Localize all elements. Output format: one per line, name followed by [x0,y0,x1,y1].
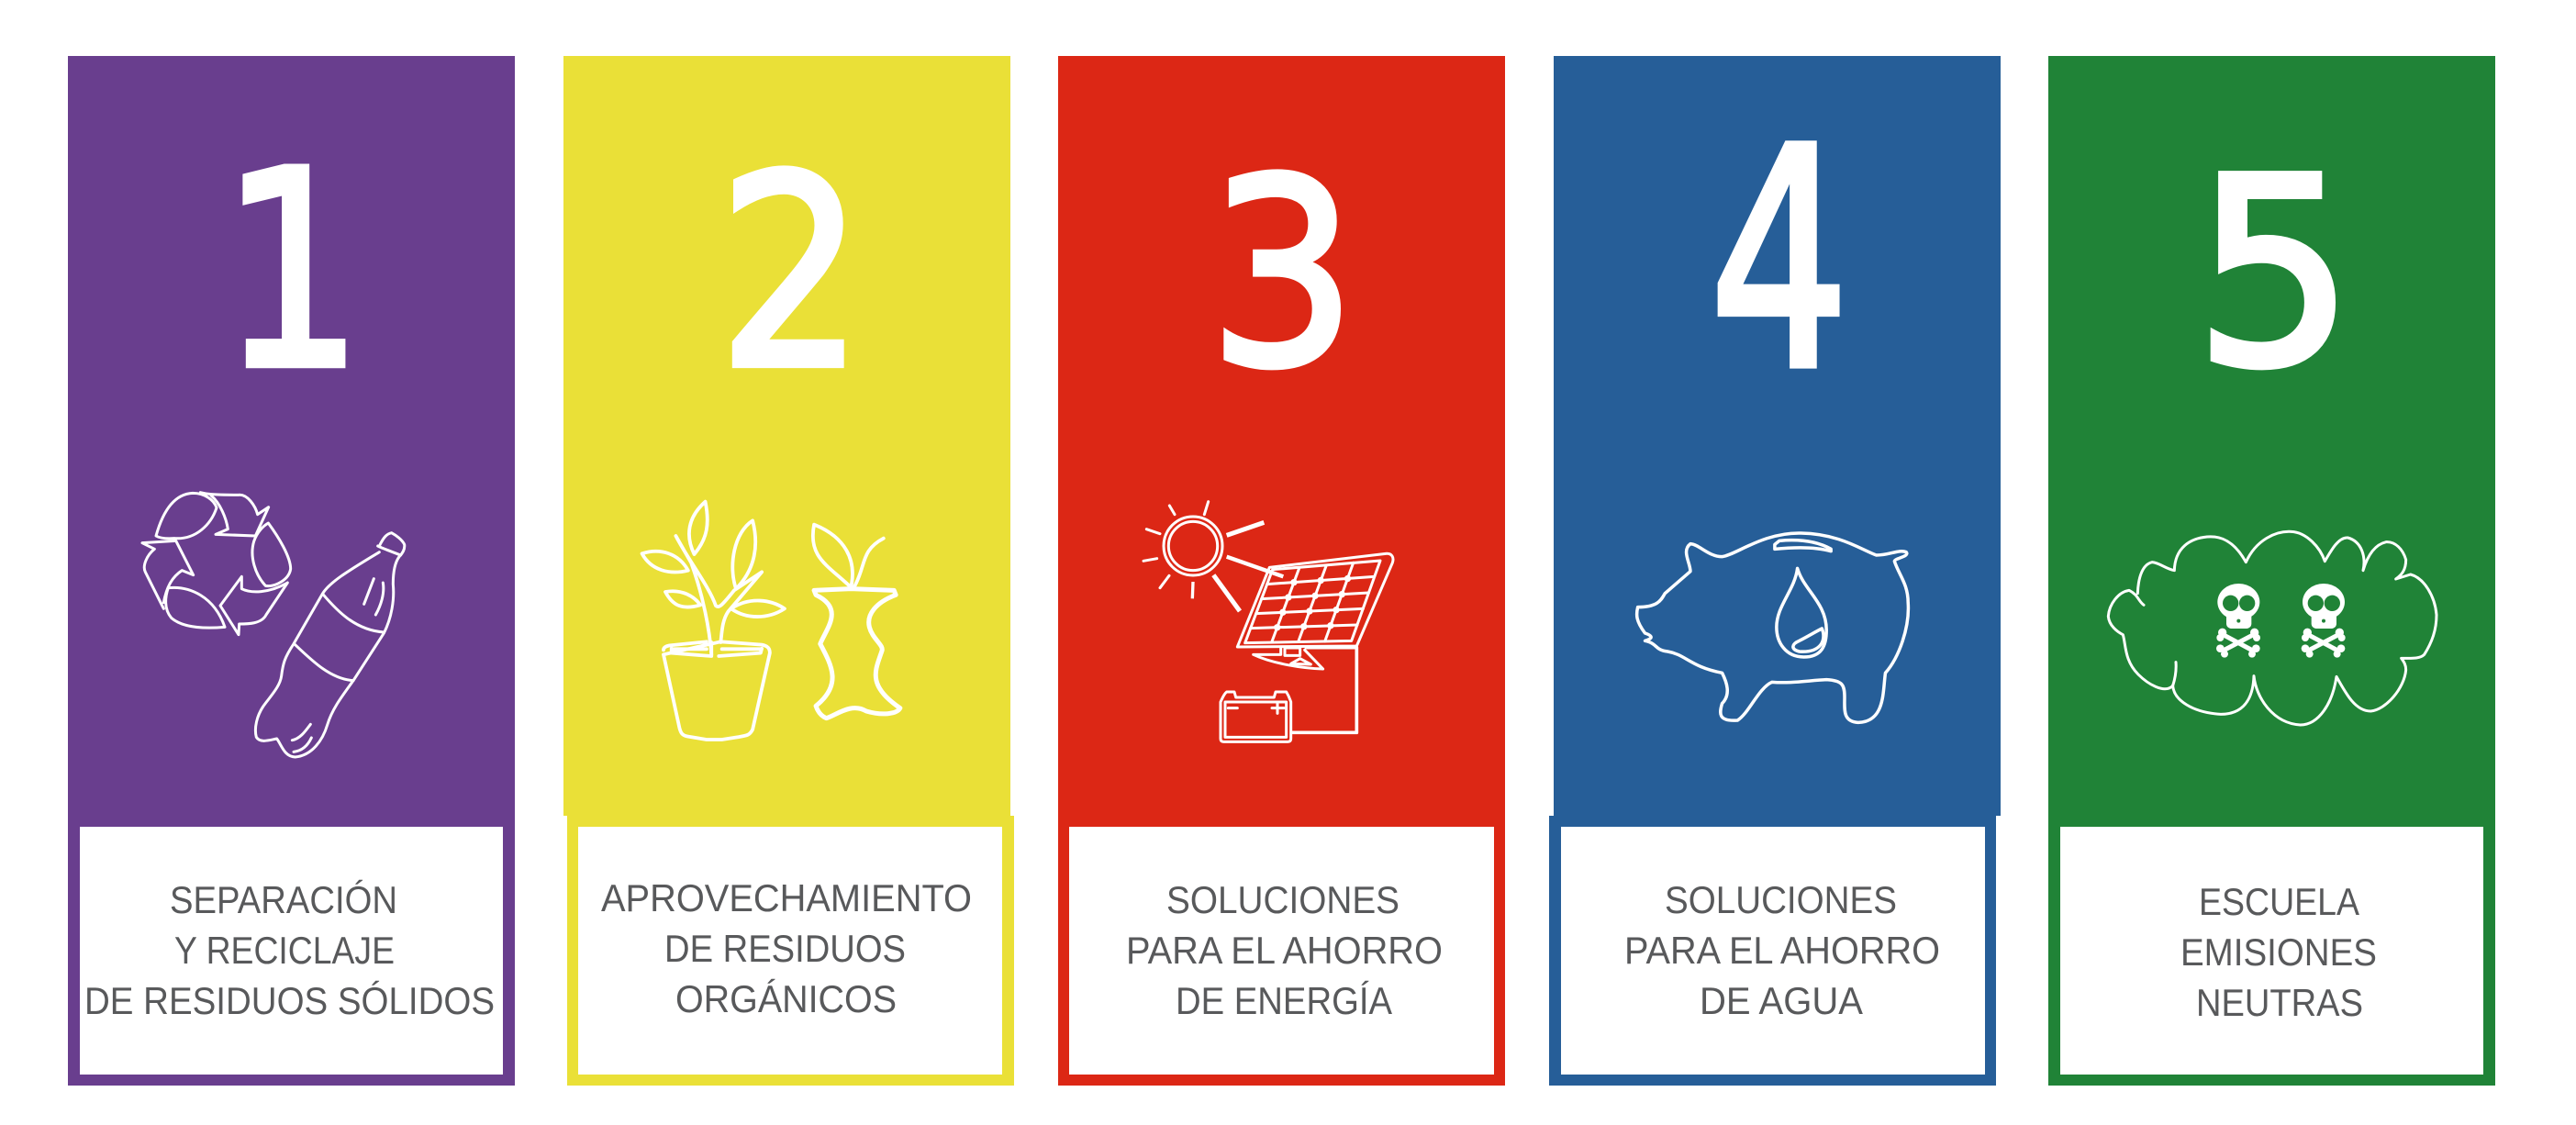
panel 3 label text: SOLUCIONES [1166,878,1400,921]
icon: potted plant and apple core [642,502,900,740]
icon: recycle symbol and plastic bottle [142,493,405,757]
panel 1 label box [80,827,503,1075]
panel 3 background [1058,56,1505,1086]
panel 2 label text: ORGÁNICOS [675,977,897,1020]
panel 3 label text: PARA EL AHORRO [1126,929,1443,972]
panel 3: soluciones para el ahorro de energía [1058,56,1505,1086]
panel 4 label text [1624,878,1940,1022]
panel 2 background [563,56,1014,1086]
panel 4 label text: DE AGUA [1700,979,1863,1022]
panel 5 background [2048,56,2495,1086]
panel 2 number: 2 [719,120,864,428]
panel 5 label text: NEUTRAS [2196,981,2363,1024]
panel 2 label text: APROVECHAMIENTO [601,876,972,919]
skull and crossbones 1 [2216,584,2260,658]
panel 4 label text: PARA EL AHORRO [1624,929,1940,972]
panel 4 label box [1561,827,1985,1075]
icon: toxic cloud with two skulls [2108,531,2437,725]
icon: sun, solar panel and battery [1143,502,1393,741]
panel 1: separación y reciclaje [68,56,515,1086]
panel 3 label text: DE ENERGÍA [1176,979,1392,1022]
panel 1 background [68,56,515,1086]
panel 5 label text [2180,880,2377,1024]
icon: piggy bank with water drop [1637,533,1908,722]
skull and crossbones 2 [2302,584,2346,658]
panel 5 label text: EMISIONES [2180,930,2377,974]
panel 1 label text: DE RESIDUOS SÓLIDOS [84,979,495,1022]
panel 2: aprovechamiento de residuos orgánicos [563,56,1014,1086]
panel 1 number: 1 [221,114,363,429]
panel 2 label box [578,827,1002,1075]
panel 4 number: 4 [1710,84,1849,436]
panel 1 label text: Y RECICLAJE [174,929,395,972]
panel 4 label text: SOLUCIONES [1665,878,1897,921]
panel 1 label text: SEPARACIÓN [170,878,397,921]
cloud outline [2108,531,2437,725]
panel 3 label text [1126,878,1443,1022]
panel 4: soluciones para el ahorro de agua [1549,56,2001,1086]
panel 5: escuela emisiones neutras [2048,56,2495,1086]
panel 5 label box [2060,827,2483,1075]
panel 3 label box [1069,827,1494,1075]
panel 2 label text [601,876,972,1020]
panel 2 label text: DE RESIDUOS [664,927,906,970]
panel 5 label text: ESCUELA [2199,880,2359,923]
panel 1 label text [84,878,495,1022]
panel 3 number: 3 [1209,125,1356,424]
panel 4 background [1549,56,2001,1086]
panel 5 number: 5 [2194,123,2354,425]
